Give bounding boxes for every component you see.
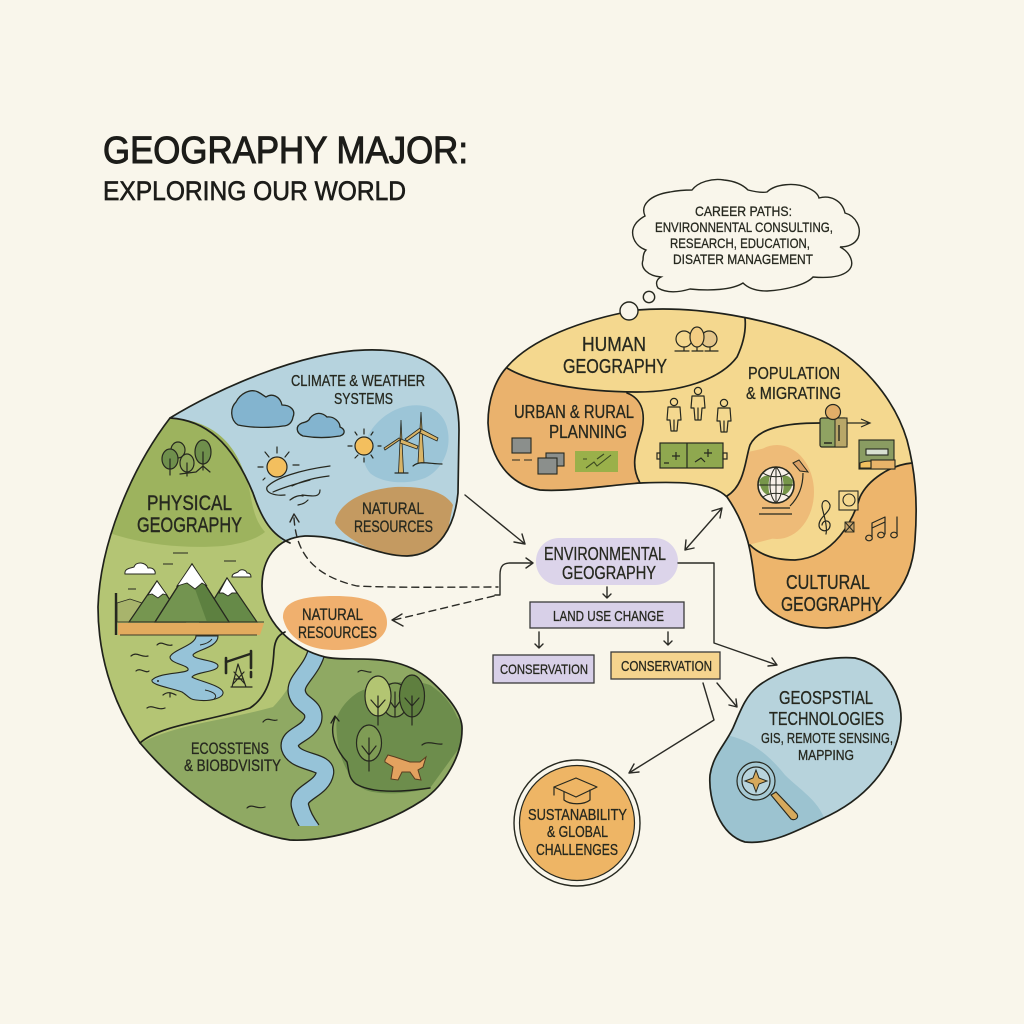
arrows: flow connectors — [465, 495, 777, 773]
blob outline — [98, 350, 462, 840]
panel: environmental geography pill: ENVIRONMENTAL — [544, 544, 666, 564]
icon: wind swirl — [267, 466, 330, 505]
icon: music notes — [866, 517, 897, 541]
label: ecosystems and biodiversity — [184, 740, 281, 775]
icon: graduation cap — [554, 778, 597, 804]
icon: forest river — [290, 650, 325, 830]
panel: human geography blob — [480, 300, 925, 640]
panel: natural resources pill — [283, 596, 387, 650]
panel: sustainability circle: SUSTANABILITY — [528, 807, 627, 824]
icon: urban squares — [512, 438, 564, 474]
box: land use change: LAND USE CHANGE — [553, 609, 664, 625]
label: cultural geography: CULTURAL — [786, 572, 870, 594]
box: conservation purple — [493, 655, 594, 683]
label: natural resources in climate: NATURAL — [362, 499, 424, 518]
label: ecosystems and biodiversity: & BIOBDVISITY — [184, 757, 281, 775]
label: natural resources in climate — [354, 499, 433, 536]
title — [103, 130, 468, 206]
icon: trees top — [162, 440, 211, 476]
callout: career paths thought bubble: DISATER MANAGEMENT — [673, 251, 813, 267]
icon: wind turbines — [384, 412, 442, 473]
box: conservation yellow: CONSERVATION — [621, 659, 712, 675]
icon: treble clef — [819, 501, 830, 534]
icon: meadow river — [152, 636, 223, 701]
label: human geography: GEOGRAPHY — [563, 356, 667, 378]
panel: physical geography blob — [90, 340, 480, 850]
panel: natural resources pill: RESOURCES — [298, 623, 377, 642]
region dividers — [140, 418, 430, 791]
callout: career paths thought bubble: RESEARCH, EDUCATION, — [670, 235, 810, 251]
panel: sustainability circle — [514, 760, 640, 886]
label: climate and weather systems: CLIMATE & WEATHER — [291, 373, 425, 390]
panel: geospatial technologies blob — [708, 656, 902, 844]
callout: career paths thought bubble: ENVIRONNENTAL CONSULTING, — [655, 219, 833, 235]
label: urban and rural planning — [514, 402, 634, 442]
icon: mountains — [116, 553, 264, 635]
icon: globe — [758, 460, 808, 514]
icon: suns — [258, 429, 381, 480]
label: urban and rural planning: PLANNING — [549, 422, 627, 442]
arrow: dashed environmental to natural resources — [392, 595, 498, 626]
title: EXPLORING OUR WORLD — [103, 176, 406, 206]
icon: outline trees — [675, 327, 718, 351]
panel: geospatial technologies blob: GEOSPSTIAL — [779, 688, 873, 708]
icon: green plan board — [657, 443, 727, 468]
icon: green map — [575, 451, 618, 472]
callout: career paths thought bubble: CAREER PATHS: — [695, 203, 792, 219]
label: population and migrating: POPULATION — [748, 363, 840, 383]
panel: natural resources pill: NATURAL — [302, 605, 363, 624]
panel: geospatial technologies blob: GIS, REMOTE SENSING, — [761, 731, 893, 747]
label: human geography — [563, 334, 667, 378]
panel: environmental geography pill — [536, 538, 678, 585]
box: conservation yellow — [611, 652, 720, 679]
heading: physical geography — [137, 492, 242, 537]
icon: forest trees — [356, 675, 424, 771]
icon: clouds — [232, 391, 344, 438]
label: climate and weather systems: SYSTEMS — [334, 391, 393, 408]
icon: migrating person — [820, 404, 870, 447]
icon: grass marks — [131, 643, 442, 808]
icon: record square — [839, 491, 858, 532]
icon: magnifier — [737, 762, 798, 820]
icon: building — [859, 440, 895, 469]
label: natural resources in climate: RESOURCES — [354, 517, 433, 536]
label: human geography: HUMAN — [582, 334, 646, 356]
label: population and migrating — [746, 363, 841, 403]
label: climate and weather systems — [291, 373, 425, 408]
label: urban and rural planning: URBAN & RURAL — [514, 402, 634, 422]
panel: geospatial technologies blob: MAPPING — [798, 748, 854, 764]
panel: environmental geography pill: GEOGRAPHY — [562, 563, 656, 583]
box: conservation purple: CONSERVATION — [500, 661, 588, 677]
blob outline — [488, 309, 916, 628]
panel: sustainability circle: & GLOBAL — [547, 824, 608, 841]
label: cultural geography — [781, 572, 882, 616]
panel: geospatial technologies blob: TECHNOLOGIES — [769, 709, 884, 729]
heading: physical geography: PHYSICAL — [147, 492, 232, 515]
box: land use change — [530, 602, 684, 628]
region dividers — [507, 318, 912, 560]
icon: people — [667, 387, 731, 432]
label: cultural geography: GEOGRAPHY — [781, 594, 882, 616]
icon: oil pump — [226, 651, 252, 687]
label: ecosystems and biodiversity: ECOSSTENS — [191, 740, 269, 758]
label: population and migrating: & MIGRATING — [746, 383, 841, 403]
callout: career paths thought bubble — [620, 179, 859, 320]
icon: dog — [385, 755, 426, 780]
title: GEOGRAPHY MAJOR: — [103, 130, 468, 172]
arrow: dashed natural resources to climate — [290, 514, 498, 587]
panel: sustainability circle: CHALLENGES — [536, 842, 618, 859]
heading: physical geography: GEOGRAPHY — [137, 514, 242, 537]
